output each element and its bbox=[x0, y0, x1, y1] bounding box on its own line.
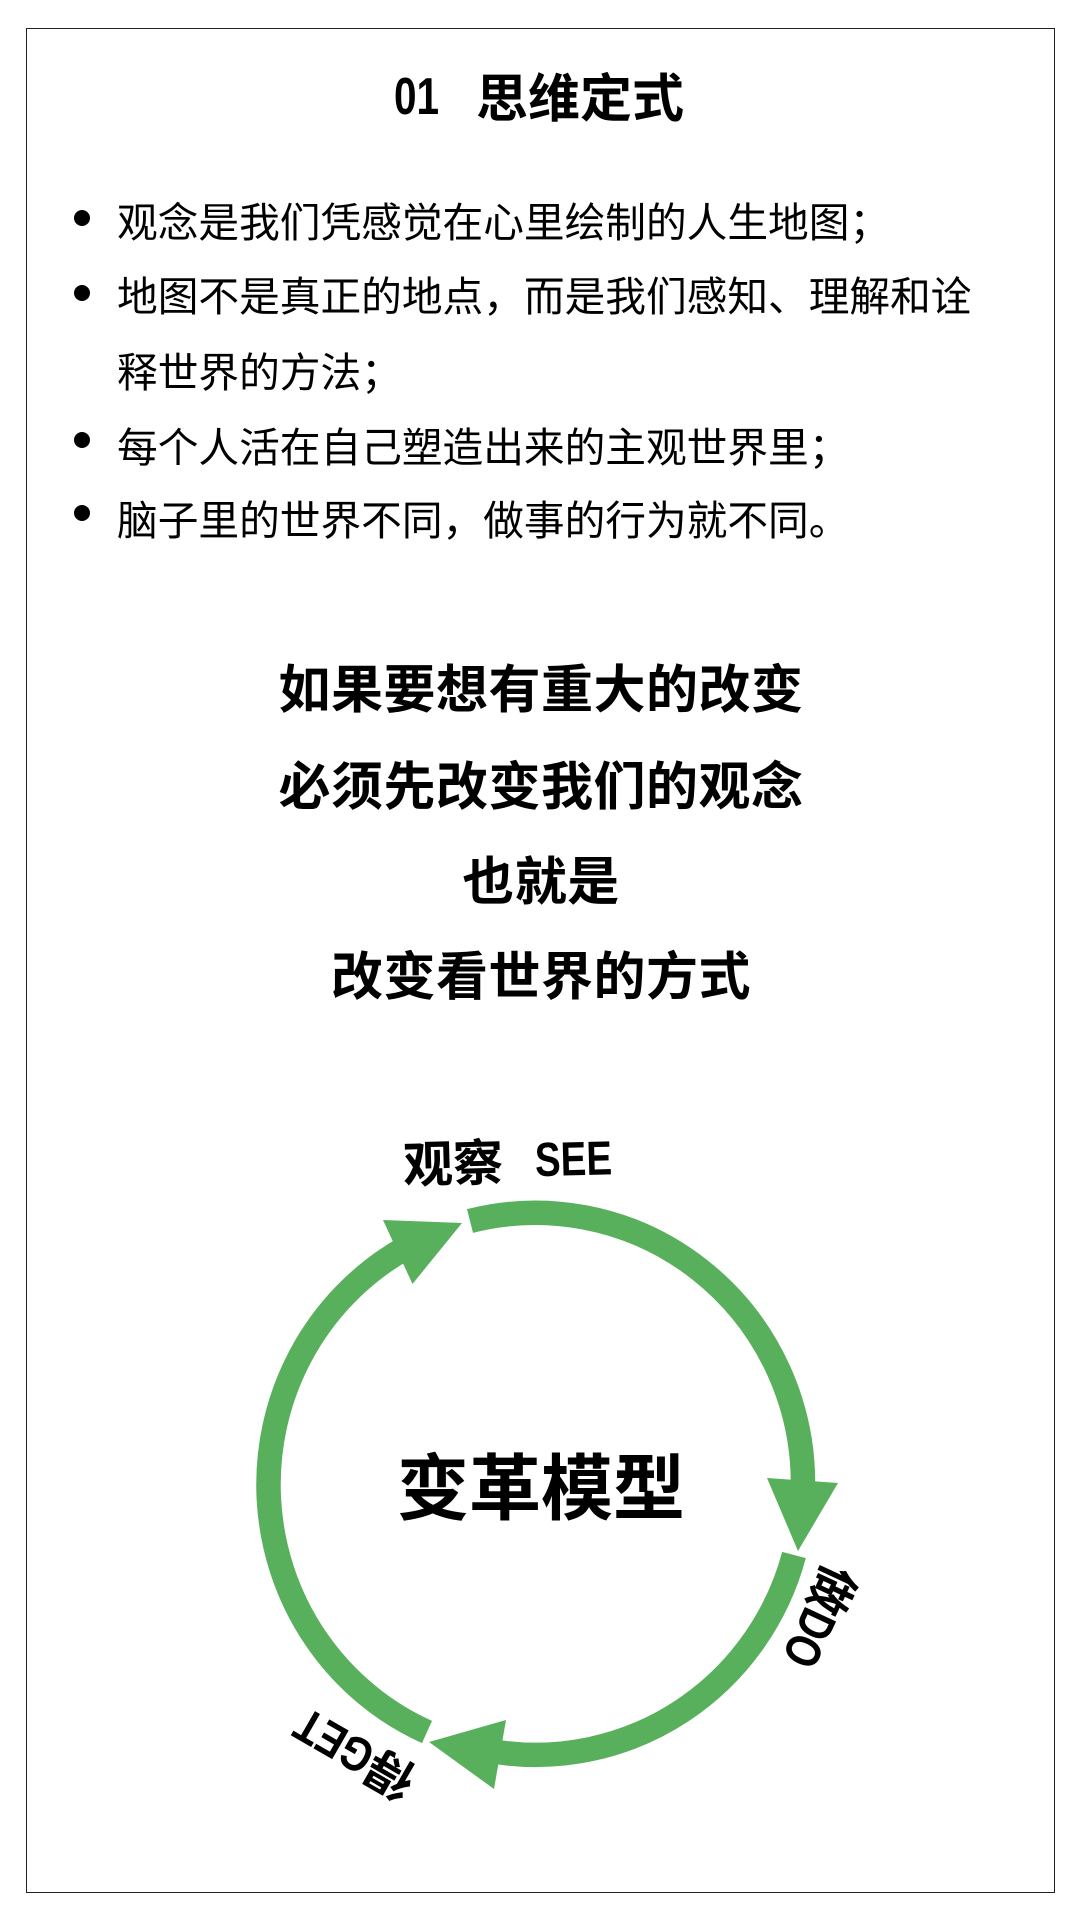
bullet item 3 bbox=[74, 432, 90, 448]
title heading: 思维定式 bbox=[476, 57, 684, 132]
bullet text 4: 脑子里的世界不同，做事的行为就不同。 bbox=[117, 488, 849, 547]
bullet text 1: 观念是我们凭感觉在心里绘制的人生地图； bbox=[117, 190, 890, 249]
arrow: see to do bbox=[470, 1213, 838, 1551]
bullet text 2 continued: 释世界的方法； bbox=[117, 340, 402, 399]
label: see: 观察 bbox=[402, 1123, 504, 1198]
label: get: GET bbox=[286, 1697, 383, 1784]
title number: 01 bbox=[394, 68, 439, 126]
bullet text 3: 每个人活在自己塑造出来的主观世界里； bbox=[117, 415, 849, 474]
label: do: 做 bbox=[793, 1555, 877, 1628]
bullet list bbox=[74, 190, 971, 547]
label: see bbox=[402, 1120, 613, 1198]
bullet item 1 bbox=[74, 210, 90, 226]
label: get bbox=[279, 1694, 426, 1820]
title bbox=[394, 57, 684, 132]
central statement bbox=[278, 648, 804, 1010]
bullet item 2 bbox=[74, 285, 90, 301]
arrow: do to get bbox=[429, 1555, 794, 1789]
label: get: 得 bbox=[350, 1735, 426, 1820]
arrow: get to see bbox=[268, 1220, 462, 1732]
label: do bbox=[769, 1555, 877, 1681]
statement line 3: 也就是 bbox=[462, 840, 620, 915]
statement line 4: 改变看世界的方式 bbox=[331, 935, 751, 1010]
bullet text 2: 地图不是真正的地点，而是我们感知、理解和诠 bbox=[117, 264, 971, 323]
bullet item 4 bbox=[74, 505, 90, 521]
center label: 变革模型 bbox=[397, 1430, 685, 1535]
label: see: SEE bbox=[534, 1132, 613, 1187]
statement line 2: 必须先改变我们的观念 bbox=[278, 745, 804, 820]
label: do: DO bbox=[771, 1600, 847, 1676]
statement line 1: 如果要想有重大的改变 bbox=[278, 648, 804, 723]
